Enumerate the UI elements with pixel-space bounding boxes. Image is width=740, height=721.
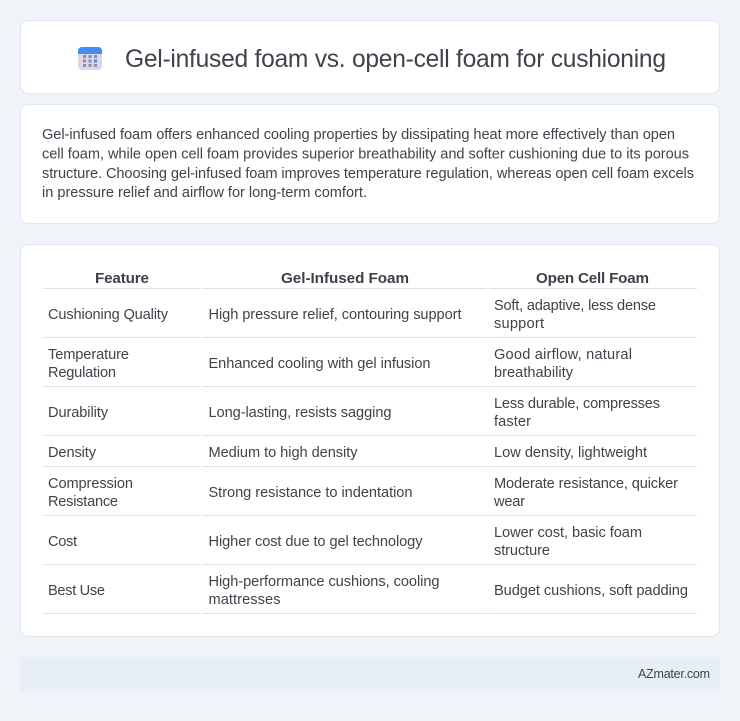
- row: best use: High-performance cushions, cooling: [208, 574, 440, 590]
- row: best use: Best Use: [48, 583, 105, 599]
- row: best use: mattresses: [208, 592, 280, 608]
- panel: title card: [20, 20, 720, 94]
- row: cost: Higher cost due to gel technology: [208, 534, 423, 550]
- footer bar: [20, 657, 720, 691]
- table header: Open Cell Foam: [536, 270, 649, 287]
- row: durability: Durability: [48, 405, 109, 421]
- panel: summary: [20, 104, 720, 224]
- row: best use: Budget cushions, soft padding: [494, 583, 688, 599]
- row: density: [48, 445, 647, 461]
- row: cushioning quality: [48, 298, 656, 332]
- row: compression resistance: Compression: [48, 476, 133, 492]
- row: cost: Lower cost, basic foam: [494, 525, 642, 541]
- row: compression resistance: Strong resistance to indentation: [208, 485, 412, 501]
- row: cost: structure: [494, 543, 550, 559]
- row: cost: Cost: [48, 534, 77, 550]
- table header: Feature: [95, 270, 149, 287]
- row: compression resistance: [48, 476, 678, 510]
- text block: summary: cell foam, while open cell foam provides superior breathability and softer cushioning due to its porous: [42, 146, 689, 162]
- row: compression resistance: Resistance: [48, 494, 118, 510]
- row: temperature regulation: [48, 347, 632, 381]
- row: cost: [48, 525, 642, 559]
- row: durability: Long-lasting, resists sagging: [208, 405, 392, 421]
- table header: Gel-Infused Foam: [281, 270, 409, 287]
- row: cushioning quality: Cushioning Quality: [48, 307, 169, 323]
- row: compression resistance: Moderate resistance, quicker: [494, 476, 678, 492]
- icon: calendar: [78, 47, 102, 70]
- row: durability: faster: [494, 414, 531, 430]
- row: durability: Less durable, compresses: [494, 396, 660, 412]
- title: Gel-infused foam vs. open-cell foam for cushioning: [125, 46, 666, 73]
- text block: summary: in pressure relief and airflow for long-term comfort.: [42, 185, 367, 201]
- row: density: Medium to high density: [208, 445, 358, 461]
- row: compression resistance: wear: [493, 494, 525, 510]
- row: best use: [48, 574, 688, 608]
- footer credit: AZmater.com: [638, 667, 710, 681]
- text block: summary: [42, 127, 694, 201]
- text block: summary: Gel-infused foam offers enhanced cooling properties by dissipating heat more effectively than open: [42, 127, 675, 143]
- row: temperature regulation: breathability: [494, 365, 574, 381]
- row: temperature regulation: Regulation: [48, 365, 116, 381]
- row: temperature regulation: Temperature: [48, 347, 129, 363]
- row: density: Low density, lightweight: [494, 445, 647, 461]
- row: temperature regulation: Good airflow, natural: [494, 347, 632, 363]
- row: cushioning quality: support: [494, 316, 544, 332]
- row: density: Density: [48, 445, 97, 461]
- panel: comparison table: [20, 244, 720, 636]
- row: temperature regulation: Enhanced cooling with gel infusion: [208, 356, 430, 372]
- row: cushioning quality: High pressure relief, contouring support: [208, 307, 462, 323]
- row: durability: [48, 396, 660, 430]
- text block: summary: structure. Choosing gel-infused foam improves temperature regulation, whereas open cell foam excels: [42, 166, 694, 182]
- row: cushioning quality: Soft, adaptive, less dense: [494, 298, 656, 314]
- table header: [95, 270, 649, 287]
